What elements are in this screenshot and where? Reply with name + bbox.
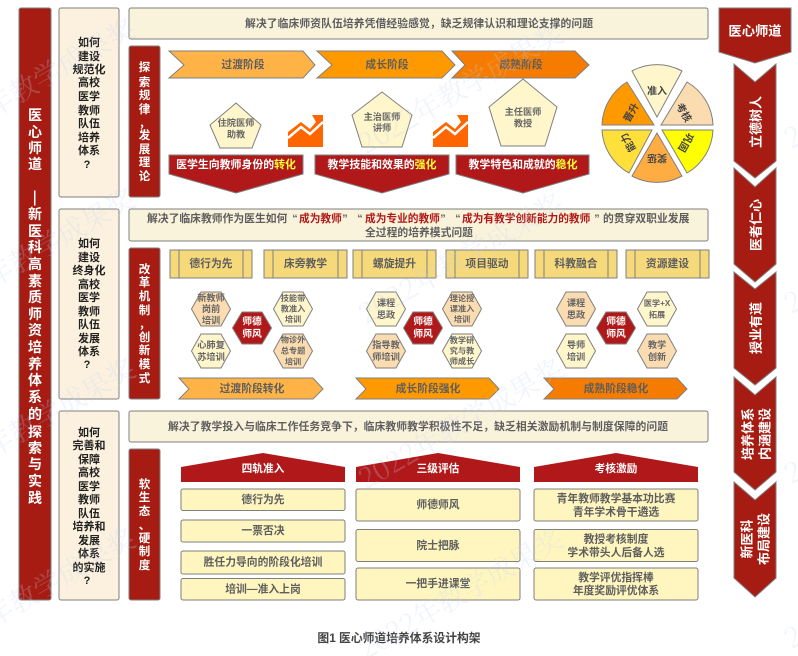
stage arrows row 1: 成长阶段: [365, 57, 409, 71]
right arrow column: 医者仁心: [748, 199, 764, 251]
column: assessment incentives: 青年教师教学基本功比赛: [557, 491, 676, 505]
panel: row 1 question: [59, 8, 119, 197]
hexagon group: mature stage: 课程: [567, 297, 585, 308]
hexagon group: transition stage: 教准入: [281, 304, 305, 314]
pie chart: [602, 65, 713, 182]
icon: growth chart 2: [433, 115, 468, 147]
column: three-level evaluation: 一把手进课堂: [406, 576, 471, 590]
red banners row 1: [169, 155, 589, 193]
column: three-level evaluation: 师德师风: [416, 497, 460, 511]
panel: row 2 question: 医学: [78, 290, 100, 304]
panel: row 1 question: 教师: [78, 103, 100, 117]
panel: row 1 question: 队伍: [78, 116, 100, 130]
hexagon group: transition stage: 岗前: [202, 303, 220, 314]
watermark: 2022年教学成果奖: [350, 183, 570, 333]
hexagon group: mature stage: 导师: [567, 340, 585, 350]
pie chart: 准入: [647, 84, 667, 98]
side label: soft and hard: [129, 449, 160, 600]
hexagon group: transition stage: 总专题: [281, 346, 305, 356]
banner: row 2 problem: ”: [342, 213, 348, 225]
pie chart: 能力: [618, 131, 639, 154]
panel: row 1 question: 医学: [78, 89, 100, 103]
tabs row 2: 床旁教学: [284, 256, 327, 270]
banner: row 2 problem: ”: [594, 213, 600, 225]
panel: row 3 question: 发展: [78, 533, 100, 547]
hexagon group: mature stage: 创新: [648, 351, 666, 362]
banner: row 2 problem: 成为专业的教师: [365, 212, 440, 225]
hexagon group: transition stage: [192, 292, 312, 368]
pentagon: resident: [210, 103, 261, 148]
banner: row 2 problem: ”: [440, 213, 446, 225]
panel: row 2 question: 终身化: [72, 263, 106, 277]
column: four-track admission: 一票否决: [241, 523, 285, 537]
left title bar: [19, 8, 51, 600]
column: assessment incentives: 教学评优指挥棒: [578, 570, 654, 584]
hexagon group: growth stage: 理论授: [450, 293, 474, 303]
hexagon group: growth stage: 师培训: [372, 351, 400, 362]
red banners row 1: 教学技能和效果的强化: [328, 157, 437, 171]
column: four-track admission: [181, 453, 345, 600]
panel: row 3 question: 保障: [78, 452, 100, 466]
pentagon: chief: 教授: [514, 118, 532, 128]
side label: reform mechanism: [129, 248, 160, 399]
panel: row 2 question: 体系: [78, 344, 100, 358]
right arrow column: 内涵建设: [758, 408, 772, 460]
hexagon group: growth stage: 师成长: [450, 356, 474, 366]
right arrow column: 授业有道: [748, 302, 764, 354]
banner: row 3 problem: 解决了教学投入与临床工作任务竞争下，临床教师教学积极性不足，缺乏相关激励机制与制度保障的问题: [168, 419, 668, 433]
panel: row 3 question: 完善和: [72, 438, 106, 452]
banner: row 1 problem: [129, 8, 708, 39]
stage arrows row 2: 成长阶段强化: [396, 381, 461, 395]
side label: explore rules: [129, 46, 160, 197]
panel: row 3 question: 教师: [78, 492, 100, 506]
panel: row 3 question: 的实施: [72, 560, 106, 574]
pentagon: resident: 助教: [227, 128, 245, 140]
hexagon group: growth stage: 培训: [454, 314, 470, 324]
hexagon group: transition stage: 培训: [285, 356, 301, 366]
column: four-track admission: 培训—准入上岗: [225, 582, 301, 596]
column: assessment incentives: 学术带头人后备人选: [567, 545, 665, 559]
column: assessment incentives: [534, 453, 698, 600]
column: four-track admission: 四轨准入: [242, 462, 285, 475]
hexagon group: transition stage: 心肺复: [197, 339, 225, 350]
pentagon: chief: 主任医师: [505, 106, 541, 117]
tabs row 2: 项目驱动: [465, 256, 509, 270]
hexagon group: transition stage: 师风: [242, 328, 262, 340]
hexagon group: mature stage: 培训: [567, 351, 585, 362]
panel: row 3 question: 队伍: [78, 506, 100, 520]
caption: 图1 医心师道培养体系设计构架: [317, 631, 481, 645]
stage arrows row 2: 成熟阶段稳化: [584, 381, 649, 395]
panel: row 3 question: 如何: [78, 425, 100, 439]
side label: explore rules: 探索规律，发展理论: [139, 61, 151, 183]
panel: row 2 question: 队伍: [78, 317, 100, 331]
hexagon group: transition stage: 培训: [285, 314, 301, 324]
hexagon group: growth stage: [366, 292, 482, 368]
stage arrows row 1: [169, 51, 589, 78]
pie chart: 奖惩: [647, 152, 667, 164]
banner: row 2 problem: “: [357, 213, 363, 225]
pentagon: chief: [489, 79, 557, 146]
panel: row 2 question: 发展: [78, 331, 100, 345]
banner: row 3 problem: [129, 411, 708, 442]
banner: row 2 problem: 解决了临床教师作为医生如何: [147, 211, 288, 225]
panel: row 1 question: 体系: [78, 143, 100, 157]
hexagon group: growth stage: 师风: [413, 328, 433, 340]
hexagon group: mature stage: 师风: [606, 328, 626, 340]
icon: growth chart 1: [288, 115, 323, 147]
pentagon: attending: [352, 92, 412, 147]
hexagon group: mature stage: 师德: [606, 314, 626, 328]
hexagon group: mature stage: 医学+X: [644, 298, 671, 308]
pie chart: 晋升: [621, 101, 642, 124]
panel: row 1 question: ?: [84, 159, 91, 171]
pentagon: resident: 住院医师: [218, 117, 254, 128]
right arrow column: 布局建设: [756, 513, 772, 565]
banner: row 2 problem: 成为教师: [299, 212, 342, 225]
column: assessment incentives: 考核激励: [595, 462, 638, 475]
right arrow column: 新医科: [740, 519, 754, 559]
pentagon: attending: 主治医师: [364, 111, 400, 122]
column: three-level evaluation: [356, 453, 520, 600]
panel: row 3 question: 高校: [78, 465, 100, 479]
stage arrows row 2: [179, 378, 687, 399]
left title bar: 医心师道: [28, 107, 42, 172]
panel: row 2 question: [59, 209, 119, 399]
hexagon group: growth stage: 课程: [377, 297, 395, 308]
column: assessment incentives: 教授考核制度: [584, 532, 649, 546]
pie chart: 考核: [673, 101, 694, 124]
hexagon group: mature stage: [556, 292, 676, 368]
hexagon group: growth stage: 思政: [377, 309, 395, 320]
banner: row 2 problem: 的贯穿双职业发展: [603, 211, 690, 225]
right arrow column: [719, 8, 791, 597]
hexagon group: mature stage: 拓展: [649, 310, 665, 320]
column: assessment incentives: 青年学术骨干遴选: [573, 504, 659, 518]
banner: row 2 problem: 全过程的培养模式问题: [365, 225, 473, 239]
stage arrows row 1: 成熟阶段: [499, 57, 543, 71]
hexagon group: transition stage: 师德: [242, 314, 262, 328]
hexagon group: growth stage: 指导教: [372, 339, 400, 350]
pie chart: 巩固: [675, 131, 696, 154]
panel: row 3 question: 体系: [78, 546, 100, 560]
hexagon group: transition stage: 苏培训: [197, 351, 225, 362]
tabs row 2: 资源建设: [646, 256, 689, 270]
panel: row 1 question: 高校: [78, 75, 100, 89]
tabs row 2: 德行为先: [189, 256, 233, 270]
panel: row 1 question: 培养: [78, 130, 100, 144]
red banners row 1: 医学生向教师身份的转化: [176, 157, 296, 171]
side label: reform mechanism: 改革机制，创新模式: [139, 262, 151, 385]
banner: row 2 problem: [129, 209, 708, 241]
panel: row 1 question: 如何: [78, 35, 100, 49]
panel: row 2 question: 教师: [78, 304, 100, 318]
stage arrows row 1: 过渡阶段: [221, 57, 265, 71]
tabs row 2: [170, 250, 709, 278]
panel: row 1 question: 建设: [78, 49, 100, 63]
panel: row 2 question: 如何: [78, 236, 100, 250]
panel: row 1 question: 规范化: [72, 62, 106, 76]
tabs row 2: 螺旋提升: [373, 256, 416, 270]
hexagon group: growth stage: 究与教: [450, 346, 475, 356]
panel: row 2 question: 高校: [78, 277, 100, 291]
pentagon: attending: 讲师: [373, 122, 391, 133]
panel: row 3 question: [59, 411, 119, 600]
column: four-track admission: 胜任力导向的阶段化培训: [204, 554, 323, 568]
right arrow column: 医心师道: [728, 22, 782, 38]
banner: row 2 problem: 成为有教学创新能力的教师: [462, 212, 591, 225]
watermark: 2022年教学成果奖: [350, 13, 570, 163]
watermark: 2022年教学成果奖: [350, 348, 570, 498]
hexagon group: transition stage: 新教师: [197, 292, 225, 303]
column: three-level evaluation: 三级评估: [417, 462, 460, 475]
panel: row 2 question: 建设: [78, 250, 100, 264]
stage arrows row 2: 过渡阶段转化: [220, 381, 285, 395]
hexagon group: transition stage: 技能带: [281, 293, 305, 303]
hexagon group: transition stage: 培训: [202, 314, 220, 326]
panel: row 2 question: ?: [84, 359, 91, 371]
right arrow column: 培养体系: [740, 408, 756, 460]
red banners row 1: 教学特色和成就的稳化: [469, 157, 578, 171]
hexagon group: growth stage: 课准入: [450, 304, 474, 314]
banner: row 2 problem: “: [292, 213, 298, 225]
banner: row 1 problem: 解决了临床师资队伍培养凭借经验感觉，缺乏规律认识和理论支撑的问题: [245, 16, 593, 30]
column: four-track admission: 德行为先: [241, 492, 285, 506]
panel: row 3 question: 医学: [78, 479, 100, 493]
hexagon group: growth stage: 教学研: [450, 335, 474, 345]
panel: row 3 question: ?: [84, 575, 91, 587]
left title bar: 新医科高素质师资培养体系的探索与实践: [28, 206, 42, 506]
banner: row 2 problem: “: [455, 213, 461, 225]
hexagon group: mature stage: 思政: [567, 309, 585, 320]
left title bar: —: [26, 190, 44, 206]
column: assessment incentives: 年度奖励评优体系: [573, 583, 659, 597]
tabs row 2: 科教融合: [554, 256, 598, 270]
hexagon group: transition stage: 物诊外: [281, 334, 306, 344]
side label: soft and hard: 软生态、硬制度: [139, 477, 151, 572]
column: three-level evaluation: 院士把脉: [416, 538, 460, 552]
right arrow column: 立德树人: [748, 96, 764, 148]
hexagon group: growth stage: 师德: [413, 314, 433, 328]
hexagon group: mature stage: 教学: [648, 339, 666, 350]
panel: row 3 question: 培养和: [72, 519, 106, 533]
